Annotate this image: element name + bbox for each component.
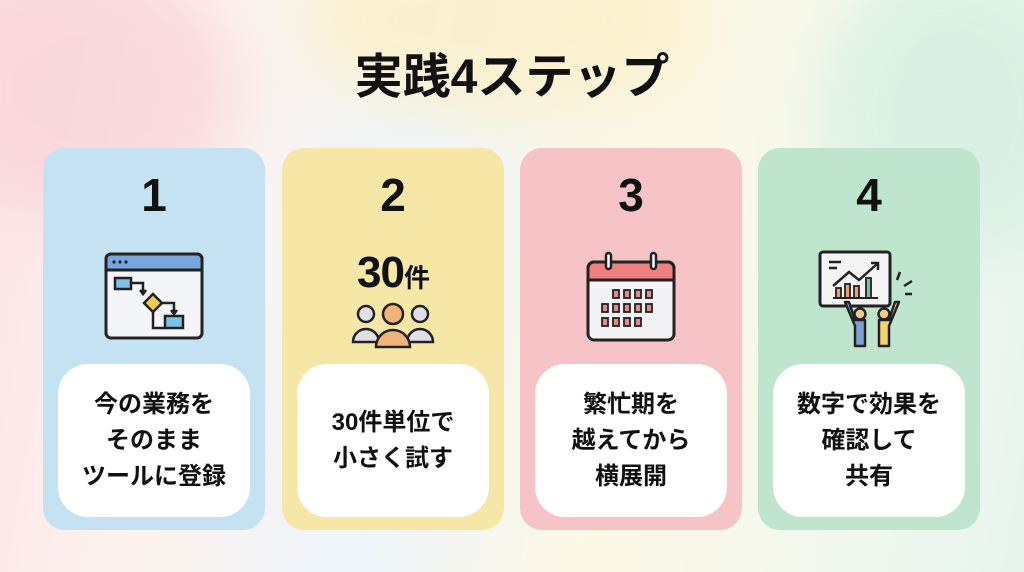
people icon: [352, 302, 434, 348]
text box: ツールに登録: [82, 462, 226, 490]
text box: [773, 364, 965, 517]
text box: 小さく試す: [333, 444, 453, 472]
text box: [535, 364, 727, 517]
text box: 繁忙期を: [583, 390, 679, 418]
text box: 数字で効果を: [797, 390, 941, 418]
icon: calendar: [586, 252, 676, 342]
number 4: 4: [856, 169, 882, 221]
icon: 30件 with people: [352, 248, 434, 348]
text box: 共有: [845, 462, 893, 490]
number 3: 3: [618, 169, 644, 221]
text box: [297, 364, 489, 517]
text box: 今の業務を: [94, 390, 214, 418]
icon: chart and cheering people: [818, 250, 913, 348]
text box: 越えてから: [572, 426, 690, 454]
label 30件: 30件: [357, 248, 429, 297]
text box: [58, 364, 250, 517]
number 2: 2: [380, 169, 406, 221]
text box: 確認して: [821, 426, 917, 454]
text box: 横展開: [595, 462, 667, 490]
panel: step 4: [758, 148, 980, 530]
text box: そのまま: [106, 426, 202, 454]
title: 実践4ステップ: [355, 51, 669, 104]
panel: step 3: [520, 148, 742, 530]
number 1: 1: [141, 169, 167, 221]
panel: step 2: [282, 148, 504, 530]
text box: 30件単位で: [332, 408, 454, 436]
icon: flowchart window: [104, 252, 204, 340]
panel: step 1: [43, 148, 265, 530]
